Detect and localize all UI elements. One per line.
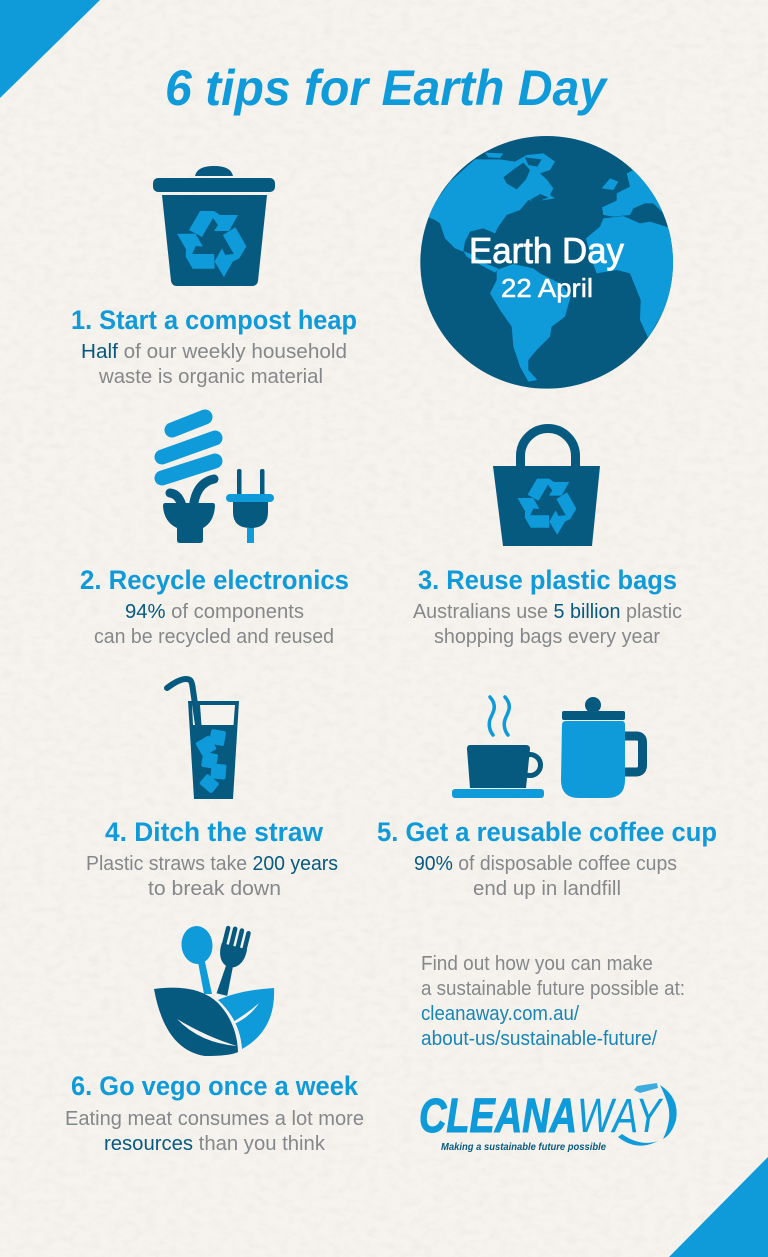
heading: 6. Go vego once a week: [71, 1071, 359, 1101]
panel: tip 2 electronics: [80, 417, 349, 648]
icon: coffee cup and reusable mug: [452, 697, 642, 798]
description: 94% of components: [125, 601, 304, 623]
globe map: [420, 136, 677, 389]
description: resources than you think: [104, 1133, 326, 1155]
globe label: date: 22 April: [501, 273, 593, 303]
globe label: Earth Day: Earth Day: [469, 230, 624, 271]
panel: tip 5 coffee cup: [377, 697, 717, 900]
description: [94, 601, 334, 648]
Cleanaway logo: [419, 1083, 677, 1153]
corner triangle: bottom right: [669, 1157, 768, 1257]
title: 6 tips for Earth Day: [165, 60, 608, 116]
description: Australians use 5 billion plastic: [413, 601, 682, 623]
logo ring: [618, 1083, 677, 1146]
description: waste is organic material: [98, 366, 323, 388]
logo wordmark light part: WAY: [577, 1090, 663, 1143]
icon: recycling bag: [493, 428, 600, 546]
heading: 4. Ditch the straw: [105, 817, 324, 847]
icon: glass with straw: [167, 679, 239, 799]
corner triangle: top left: [0, 0, 100, 98]
description: end up in landfill: [473, 878, 621, 900]
call to action text: a sustainable future possible at:: [421, 978, 685, 1000]
description: Plastic straws take 200 years: [86, 853, 338, 875]
heading: 2. Recycle electronics: [80, 565, 349, 595]
panel: tip 4 straw: [86, 679, 338, 900]
description: Eating meat consumes a lot more: [65, 1108, 364, 1130]
panel: tip 6 vego: [65, 925, 364, 1155]
icon: light bulb and plug: [162, 417, 274, 543]
call to action text: cleanaway.com.au/: [421, 1003, 579, 1025]
logo tagline: Making a sustainable future possible: [441, 1141, 606, 1153]
logo wordmark bold part: CLEANA: [419, 1090, 577, 1143]
description: to break down: [148, 878, 281, 900]
description: [86, 853, 338, 900]
call to action text: Find out how you can make: [421, 953, 653, 975]
panel: tip 1 compost: [71, 166, 357, 388]
heading: 3. Reuse plastic bags: [418, 565, 677, 595]
description: [413, 601, 682, 648]
description: 90% of disposable coffee cups: [414, 853, 677, 875]
icon: recycling bin: [153, 166, 275, 286]
call to action text: [421, 953, 685, 1050]
heading: 1. Start a compost heap: [71, 305, 357, 335]
icon: spoon, fork and leaves: [154, 925, 274, 1056]
description: [65, 1108, 364, 1155]
description: shopping bags every year: [434, 626, 660, 648]
call to action text: about-us/sustainable-future/: [421, 1028, 657, 1050]
heading: 5. Get a reusable coffee cup: [377, 817, 717, 847]
description: can be recycled and reused: [94, 626, 334, 648]
description: Half of our weekly household: [81, 341, 347, 363]
globe: Earth Day badge: [420, 136, 677, 389]
description: [81, 341, 347, 388]
description: [414, 853, 677, 900]
panel: tip 3 plastic bags: [413, 428, 682, 648]
